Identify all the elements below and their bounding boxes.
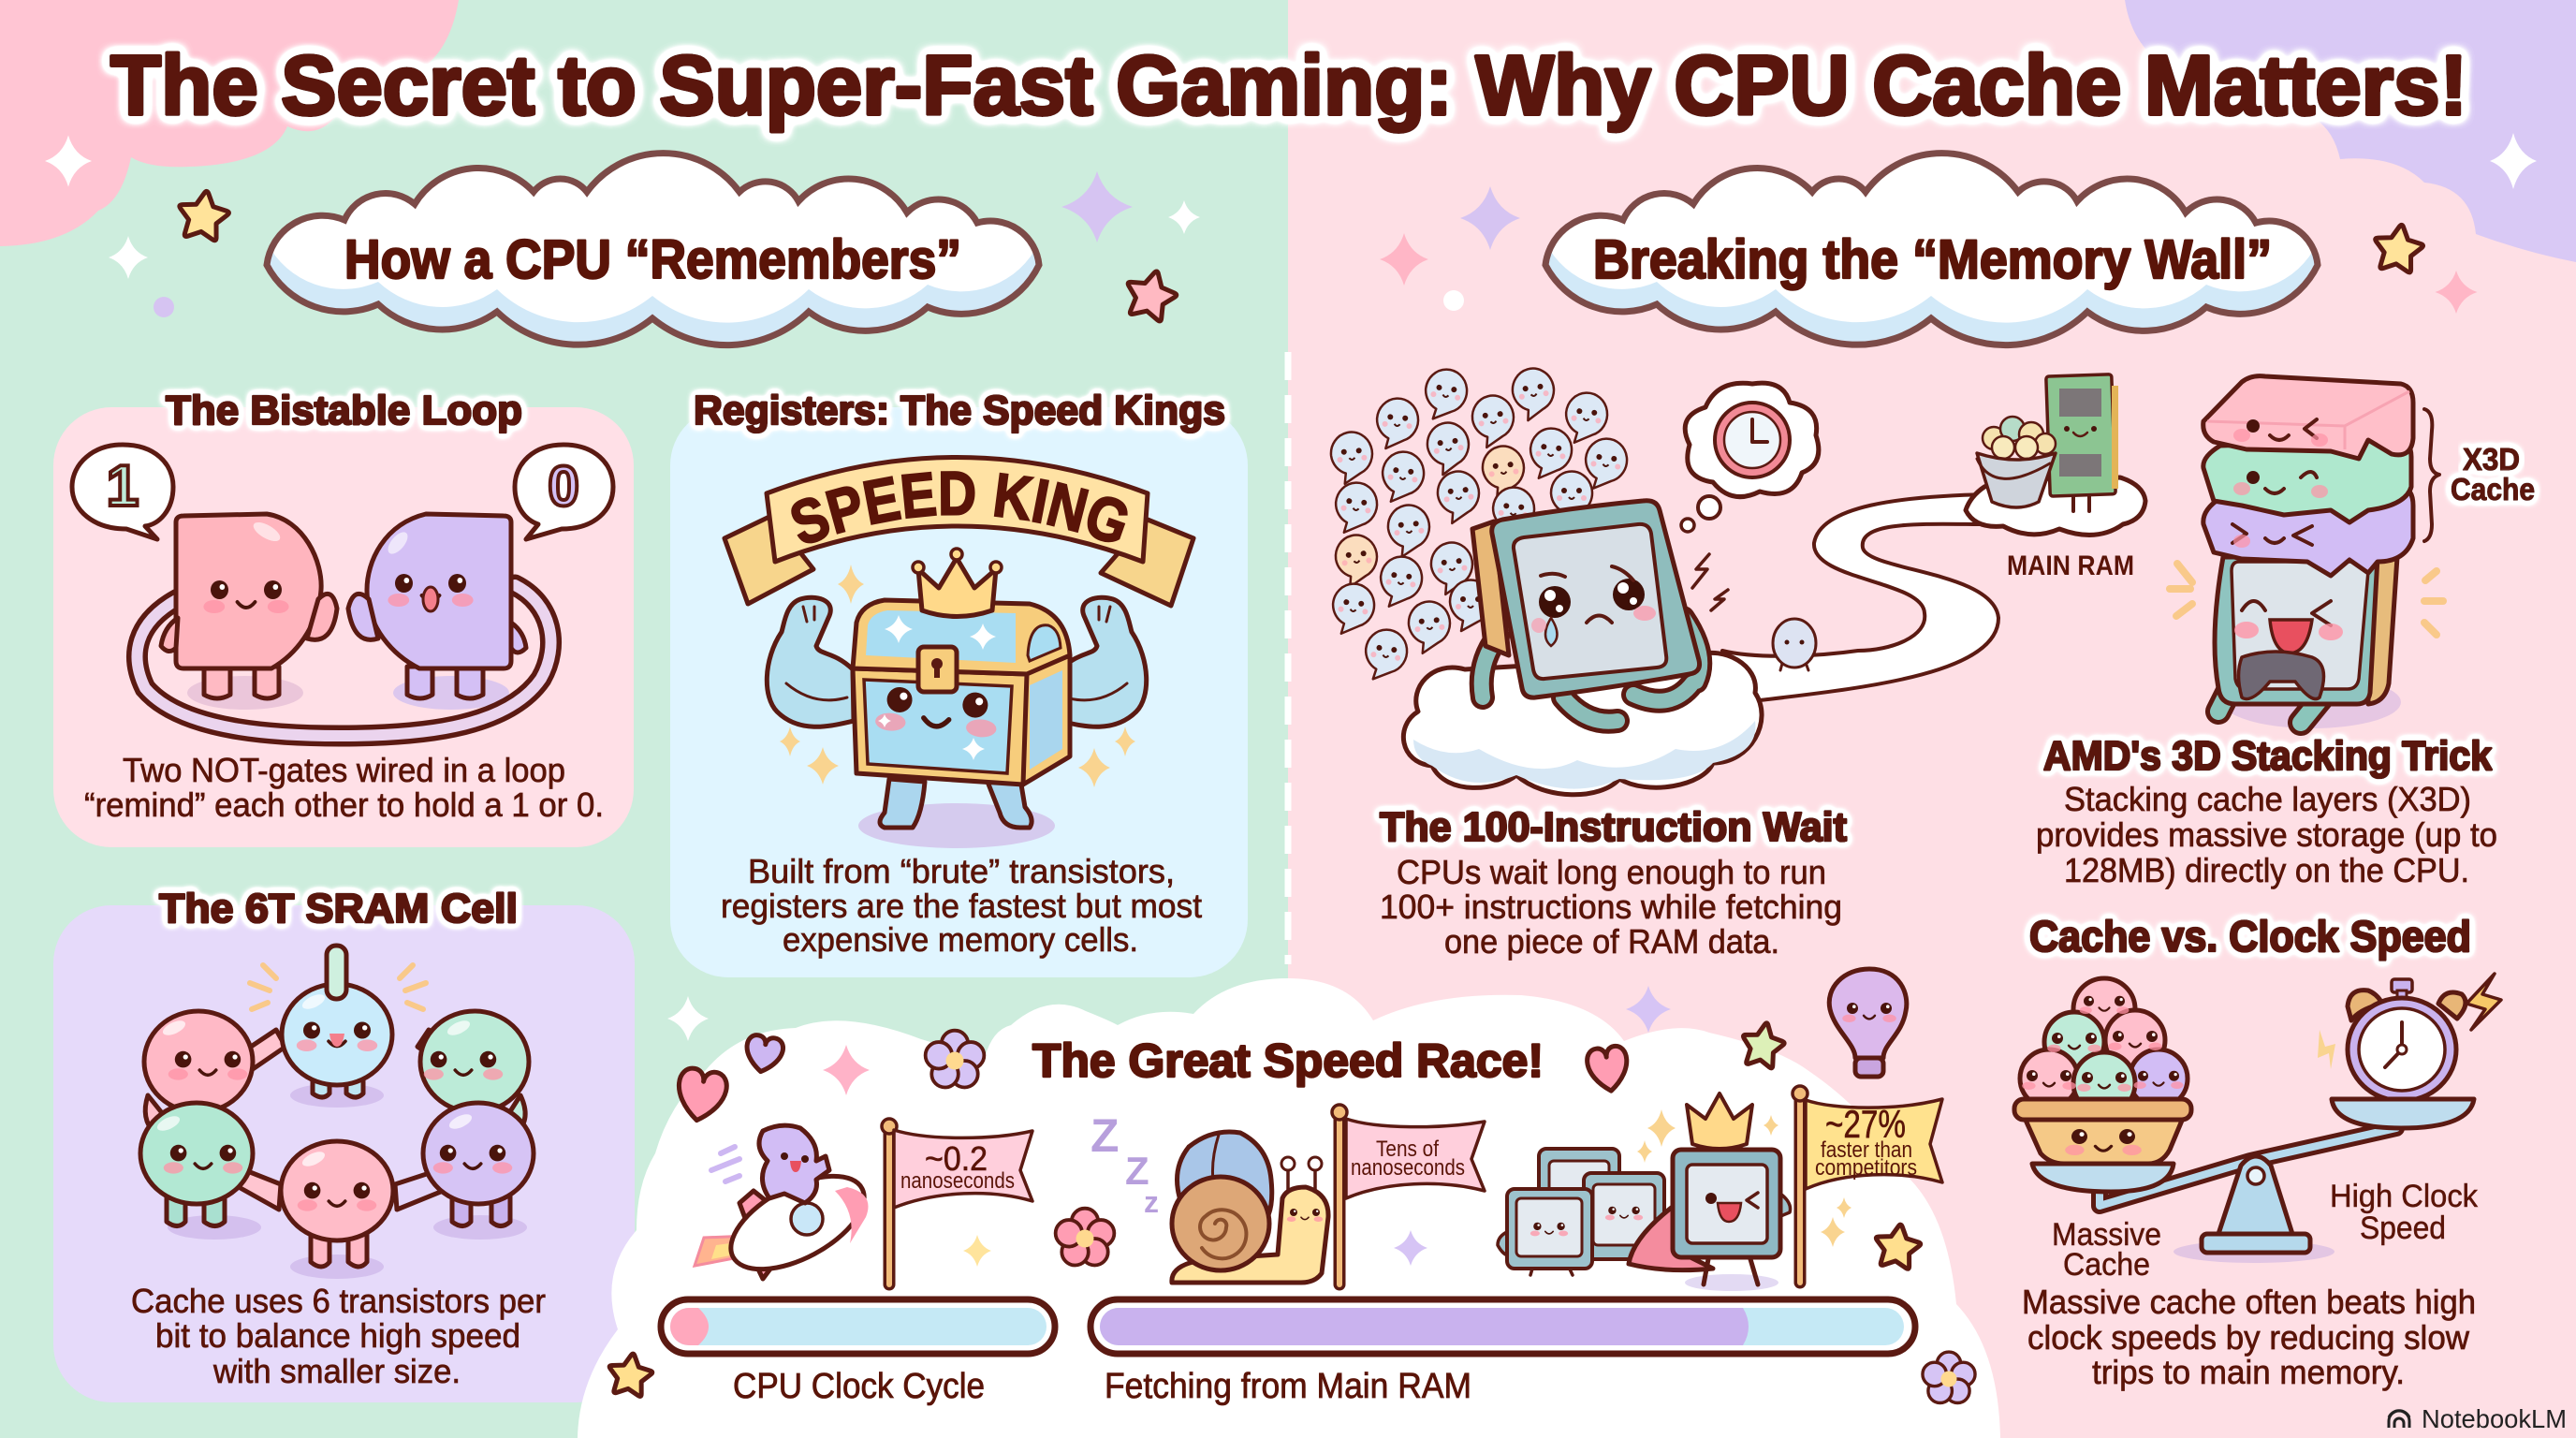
flag: 27 percent faster: ~27% xyxy=(1825,1102,1906,1146)
sparkles xyxy=(1637,1109,1852,1247)
cape xyxy=(1629,1203,1713,1270)
illustration: snail with backpack: Z xyxy=(1125,1149,1149,1193)
label: massive cache xyxy=(2052,1217,2161,1283)
description: one piece of RAM data. xyxy=(1444,922,1779,961)
illustration: X3D cache stack on happy CPU xyxy=(2170,376,2443,728)
heading: AMD's 3D stacking trick: AMD's 3D Stacking Trick xyxy=(2043,733,2492,779)
heading: cache vs clock speed: Cache vs. Clock Speed xyxy=(2029,912,2471,961)
flag: 0.2 nanoseconds: nanoseconds xyxy=(900,1168,1015,1194)
label: CPU clock cycle: CPU Clock Cycle xyxy=(733,1367,985,1406)
speech bubble: 0: 0 xyxy=(548,455,579,518)
section banner: breaking the memory wall xyxy=(1545,131,2318,345)
arms xyxy=(145,1030,525,1210)
cloud xyxy=(1403,653,1762,795)
small CPU: middle xyxy=(1584,1173,1664,1259)
transistor: pink left xyxy=(144,1011,253,1112)
flag: 0.2 nanoseconds: ~0.2 xyxy=(925,1139,988,1178)
rays xyxy=(2170,564,2443,635)
panel: the great speed race cloud xyxy=(578,969,2000,1438)
label: massive cache: Cache xyxy=(2063,1247,2150,1283)
crown xyxy=(913,549,1002,616)
chip xyxy=(1472,521,1509,655)
background: mint left half xyxy=(0,0,1288,1438)
heading: registers: Registers: The Speed Kings xyxy=(694,388,1225,433)
description: with smaller size. xyxy=(212,1352,461,1390)
label: main RAM: MAIN RAM xyxy=(2007,550,2134,581)
left pan with basket of cache balls xyxy=(2014,978,2191,1192)
illustration: two NOT-gate characters in a loop xyxy=(72,445,613,736)
purple cache layer xyxy=(2203,487,2413,576)
illustration: snail with backpack xyxy=(1090,1109,1328,1283)
watermark: NotebookLM: NotebookLM xyxy=(2422,1404,2567,1433)
description xyxy=(2036,780,2497,889)
crown xyxy=(1687,1093,1752,1149)
flag: 27 percent faster xyxy=(1793,1086,1942,1283)
pink cache layer xyxy=(2203,376,2413,459)
flag: tens of nanoseconds xyxy=(1332,1105,1485,1284)
flag: 27 percent faster: competitors xyxy=(1815,1155,1917,1181)
section banner: how a CPU remembers xyxy=(267,131,1039,345)
illustration: waiting speech bubbles xyxy=(1329,366,1630,683)
panel: the 6T SRAM cell xyxy=(53,905,635,1402)
banner: speed king: SPEED KING xyxy=(791,471,1128,543)
mint cache layer xyxy=(2203,440,2411,522)
happy CPU xyxy=(2215,557,2397,723)
description: Cache uses 6 transistors per xyxy=(131,1282,546,1320)
transistor: pink bottom xyxy=(281,1141,393,1267)
sad face xyxy=(1531,566,1656,646)
description: Built from “brute” transistors, xyxy=(748,852,1175,890)
toggle glow xyxy=(327,946,346,999)
illustration: sad CPU on a cloud xyxy=(1403,501,1762,795)
speech bubble: 0 xyxy=(515,445,613,539)
panel: the bistable loop xyxy=(53,407,634,847)
progress bar: CPU clock cycle xyxy=(661,1299,1055,1354)
label: massive cache: Massive xyxy=(2052,1217,2161,1253)
label: X3D cache: X3D xyxy=(2463,442,2520,477)
big CPU xyxy=(1673,1150,1791,1284)
top-left sparkles and stars xyxy=(45,135,1200,324)
speech bubble: 1 xyxy=(72,445,173,539)
illustration: six transistors holding hands xyxy=(140,946,534,1279)
description xyxy=(1380,853,1842,961)
section banner: how a CPU remembers: How a CPU “Remembers” xyxy=(344,229,961,290)
flag: 27 percent faster: faster than xyxy=(1821,1137,1912,1163)
label: X3D cache xyxy=(2451,442,2535,506)
description: Two NOT-gates wired in a loop xyxy=(123,751,565,789)
stress zigzags xyxy=(1692,554,1728,610)
decorative lilac corner cloud xyxy=(2125,0,2576,262)
description: provides massive storage (up to xyxy=(2036,815,2497,854)
title: The Secret to Super-Fast Gaming: Why CPU Cache Matters! xyxy=(110,39,2467,133)
label: X3D cache: Cache xyxy=(2451,472,2535,506)
progress bar: fetching from main RAM xyxy=(1090,1299,1915,1354)
description: 100+ instructions while fetching xyxy=(1380,888,1842,926)
label: fetching from main RAM: Fetching from Main RAM xyxy=(1105,1367,1471,1406)
beam xyxy=(2100,1103,2396,1206)
section banner: breaking the memory wall: Breaking the “Memory Wall” xyxy=(1593,229,2272,290)
flag: 0.2 nanoseconds xyxy=(882,1119,1032,1284)
transistor: mint right xyxy=(420,1011,529,1112)
transistor: purple lower right xyxy=(423,1103,534,1226)
illustration: rocket with purple rider xyxy=(695,1125,879,1288)
small CPU: front xyxy=(1498,1189,1592,1275)
illustration: winding road to RAM xyxy=(1722,494,1998,700)
description: registers are the fastest but most xyxy=(721,887,1202,925)
flag: tens of nanoseconds: Tens of xyxy=(1376,1137,1439,1162)
description xyxy=(2022,1283,2476,1391)
top-right sparkles and stars xyxy=(1380,133,2537,314)
description: expensive memory cells. xyxy=(783,920,1138,959)
description: trips to main memory. xyxy=(2092,1353,2405,1391)
right pan with clock xyxy=(2318,974,2501,1128)
dashed divider xyxy=(1284,352,1292,964)
label: high clock speed: High Clock xyxy=(2330,1179,2479,1214)
illustration: balance scale xyxy=(2014,974,2501,1263)
heading: the 6T SRAM cell: The 6T SRAM Cell xyxy=(159,886,518,932)
illustration: speed king treasure chest xyxy=(722,455,1196,848)
background: pink right half xyxy=(1288,0,2576,1438)
banner: speed king xyxy=(722,455,1196,609)
transistor: top blue xyxy=(282,984,392,1097)
label: high clock speed: Speed xyxy=(2360,1211,2446,1246)
decorative pink corner cloud xyxy=(0,0,459,246)
heading: the great speed race: The Great Speed Race! xyxy=(1032,1034,1544,1087)
description xyxy=(84,751,604,824)
description: Stacking cache layers (X3D) xyxy=(2064,780,2471,818)
description xyxy=(131,1282,546,1390)
description: CPUs wait long enough to run xyxy=(1397,853,1826,891)
rays xyxy=(250,965,426,1009)
gold sparkles xyxy=(780,565,1135,787)
illustration: X3D CPU winning team xyxy=(1498,1093,1852,1291)
panel: registers xyxy=(670,407,1248,977)
brace xyxy=(2424,409,2439,541)
description: 128MB) directly on the CPU. xyxy=(2064,851,2469,889)
heading: the bistable loop: The Bistable Loop xyxy=(166,388,522,433)
legs and arms xyxy=(1482,618,1700,722)
game controller xyxy=(2239,652,2323,699)
illustration: main RAM on cloud with bucket xyxy=(1966,374,2145,535)
description: Massive cache often beats high xyxy=(2022,1283,2476,1321)
flag: tens of nanoseconds: nanoseconds xyxy=(1351,1155,1465,1181)
description: clock speeds by reducing slow xyxy=(2027,1318,2470,1357)
transistor: mint lower left xyxy=(140,1103,253,1226)
icon: lightbulb character xyxy=(1829,969,1907,1077)
description xyxy=(721,852,1202,959)
small CPU: back xyxy=(1539,1149,1619,1242)
illustration: snail with backpack: z xyxy=(1144,1185,1159,1219)
illustration: snail with backpack: Z xyxy=(1090,1109,1120,1162)
heading: the 100-instruction wait: The 100-Instruction Wait xyxy=(1380,804,1847,850)
fulcrum xyxy=(2218,1156,2292,1234)
decorations xyxy=(606,986,1975,1402)
speech bubble: 1: 1 xyxy=(107,454,139,519)
label: high clock speed xyxy=(2330,1179,2479,1246)
thought bubble: clock xyxy=(1681,383,1819,532)
illustration: small bit walking on road xyxy=(1773,619,1816,670)
description: bit to balance high speed xyxy=(155,1316,520,1355)
description: “remind” each other to hold a 1 or 0. xyxy=(84,785,604,824)
